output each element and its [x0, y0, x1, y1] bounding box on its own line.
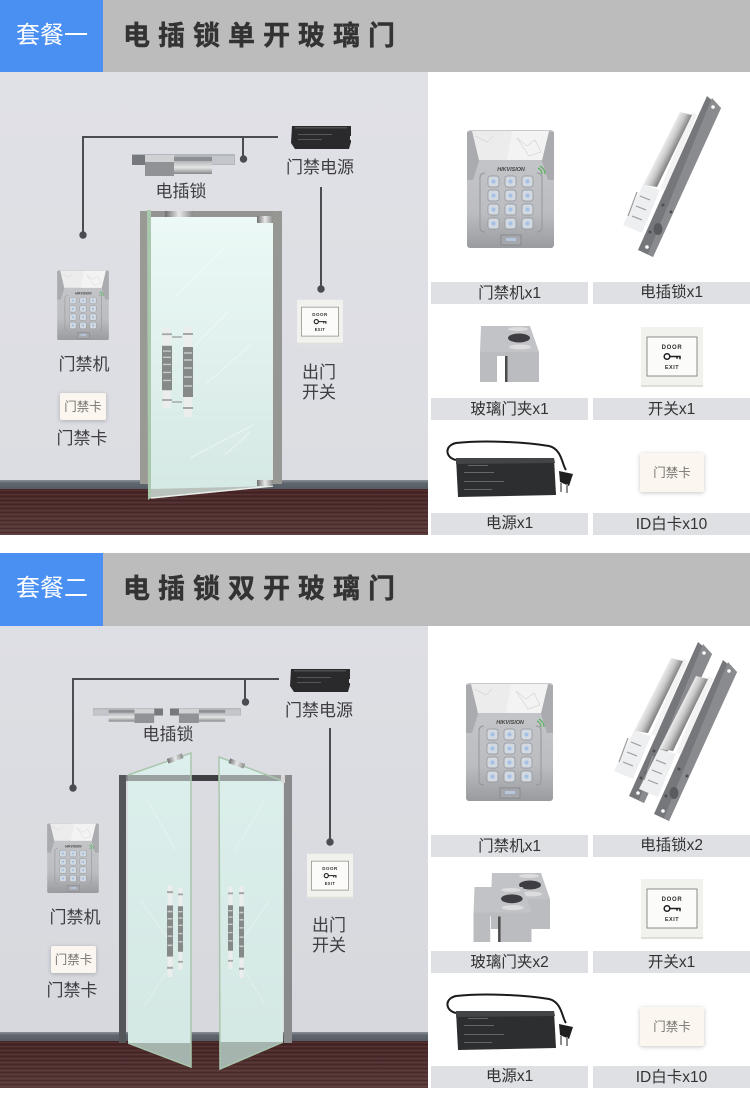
item: keypad: 门禁机x1 — [478, 284, 541, 302]
label: access card: 门禁卡 — [46, 981, 98, 1000]
item: ID cards: ID白卡x10 — [636, 1068, 708, 1086]
icon: exit switch — [307, 854, 353, 898]
label: exit switch: 出门 — [302, 363, 336, 382]
section: package one — [0, 0, 750, 535]
label: access keypad: 门禁机 — [50, 908, 100, 927]
item: switch — [593, 327, 750, 420]
item: ID cards — [593, 1007, 750, 1088]
icon: power supply — [291, 126, 353, 149]
icon: access card: 门禁卡 — [55, 952, 92, 967]
section: package two — [0, 553, 750, 1088]
label: access keypad: 门禁机 — [58, 355, 110, 374]
item: power supply — [431, 995, 588, 1088]
item: keypad — [431, 130, 588, 304]
item: electric locks: 电插锁x2 — [640, 836, 703, 854]
wiring lines — [79, 137, 325, 293]
label: exit switch: 开关 — [302, 383, 336, 402]
single glass door — [140, 210, 282, 500]
item: glass door clamps: 玻璃门夹x2 — [470, 953, 549, 971]
label: exit switch: 出门 — [312, 916, 346, 935]
item: switch: 开关x1 — [648, 400, 695, 418]
icon: electric lock right — [170, 708, 241, 723]
icon: electric lock — [132, 154, 235, 176]
item: keypad — [431, 683, 588, 857]
item: electric lock — [593, 96, 750, 304]
label: exit switch: 开关 — [312, 936, 346, 955]
icon: exit switch — [297, 300, 343, 344]
header bar: package one: 电插锁单开玻璃门 — [123, 21, 403, 51]
item: glass door clamp: 玻璃门夹x1 — [470, 400, 549, 418]
item: switch: 开关x1 — [648, 953, 695, 971]
item: ID cards: ID白卡x10 — [636, 515, 708, 533]
header bar: package one: 套餐一 — [16, 22, 88, 49]
item: ID cards — [593, 453, 750, 535]
item: power supply: 电源x1 — [486, 514, 533, 532]
icon: power supply — [290, 669, 352, 692]
item: ID cards: 门禁卡 — [653, 1019, 691, 1034]
item: power supply — [431, 442, 588, 535]
panel: single door wiring scene — [0, 72, 428, 535]
header bar: package two: 电插锁双开玻璃门 — [123, 574, 403, 604]
item: electric locks — [593, 642, 750, 857]
icon: electric lock left — [93, 708, 163, 723]
icon: access card — [51, 946, 96, 973]
wiring lines — [69, 679, 334, 846]
item: glass door clamps — [431, 873, 588, 973]
label: power supply: 门禁电源 — [285, 701, 353, 720]
item: glass door clamp — [431, 326, 588, 420]
item: switch — [593, 879, 750, 973]
header bar: package two — [0, 553, 750, 626]
panel: double door wiring scene — [0, 626, 428, 1088]
label: access card: 门禁卡 — [56, 429, 108, 448]
icon: access card: 门禁卡 — [64, 399, 102, 414]
panel: package two contents — [431, 642, 750, 1088]
panel: package one contents — [431, 96, 750, 535]
label: electric lock: 电插锁 — [156, 182, 206, 201]
icon: access keypad — [47, 823, 99, 893]
label: power supply: 门禁电源 — [286, 158, 354, 177]
label: electric lock: 电插锁 — [142, 725, 194, 744]
icon: access card — [60, 393, 106, 420]
item: power supply: 电源x1 — [486, 1067, 533, 1085]
item: electric lock: 电插锁x1 — [640, 283, 703, 301]
item: ID cards: 门禁卡 — [653, 465, 691, 480]
header bar: package two: 套餐二 — [16, 575, 88, 602]
icon: access keypad — [57, 270, 109, 340]
double glass doors — [119, 753, 292, 1069]
header bar: package one — [0, 0, 750, 72]
item: keypad: 门禁机x1 — [478, 837, 541, 855]
